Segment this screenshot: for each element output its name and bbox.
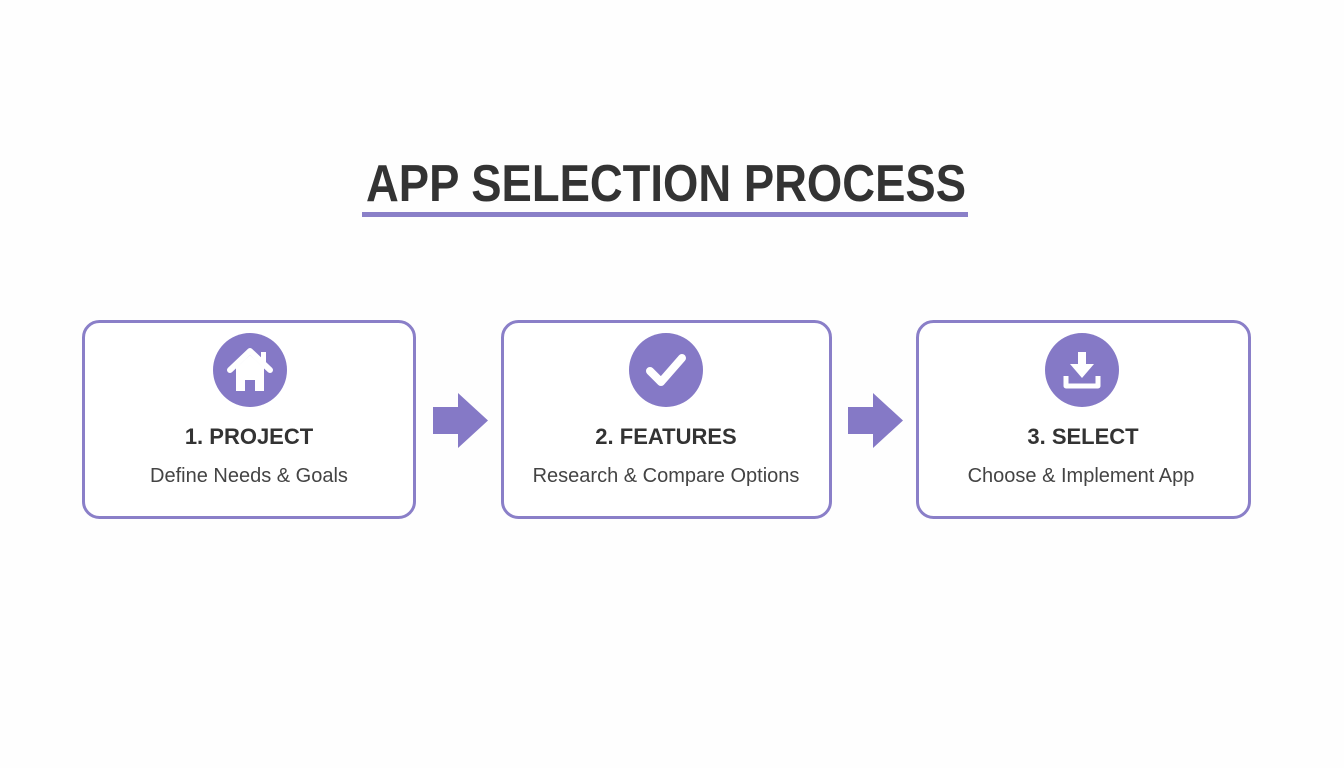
panel: step 2 features	[502, 322, 830, 518]
heading: 1. PROJECT: 1. PROJECT	[185, 424, 314, 449]
arrow 2	[848, 393, 903, 448]
icon: house	[213, 333, 287, 407]
text: define needs: Define Needs & Goals	[150, 465, 348, 487]
title: APP SELECTION PROCESS	[366, 155, 966, 213]
title underline	[362, 212, 968, 217]
icon: download	[1045, 333, 1119, 407]
icon: check	[629, 333, 703, 407]
arrow 1	[433, 393, 488, 448]
heading: 2. FEATURES: 2. FEATURES	[595, 424, 737, 449]
text: research: Research & Compare Options	[533, 465, 799, 487]
heading: 3. SELECT: 3. SELECT	[1027, 424, 1139, 449]
panel: step 1 project	[84, 322, 414, 518]
panel: step 3 select	[918, 322, 1250, 518]
text: choose: Choose & Implement App	[968, 465, 1194, 487]
